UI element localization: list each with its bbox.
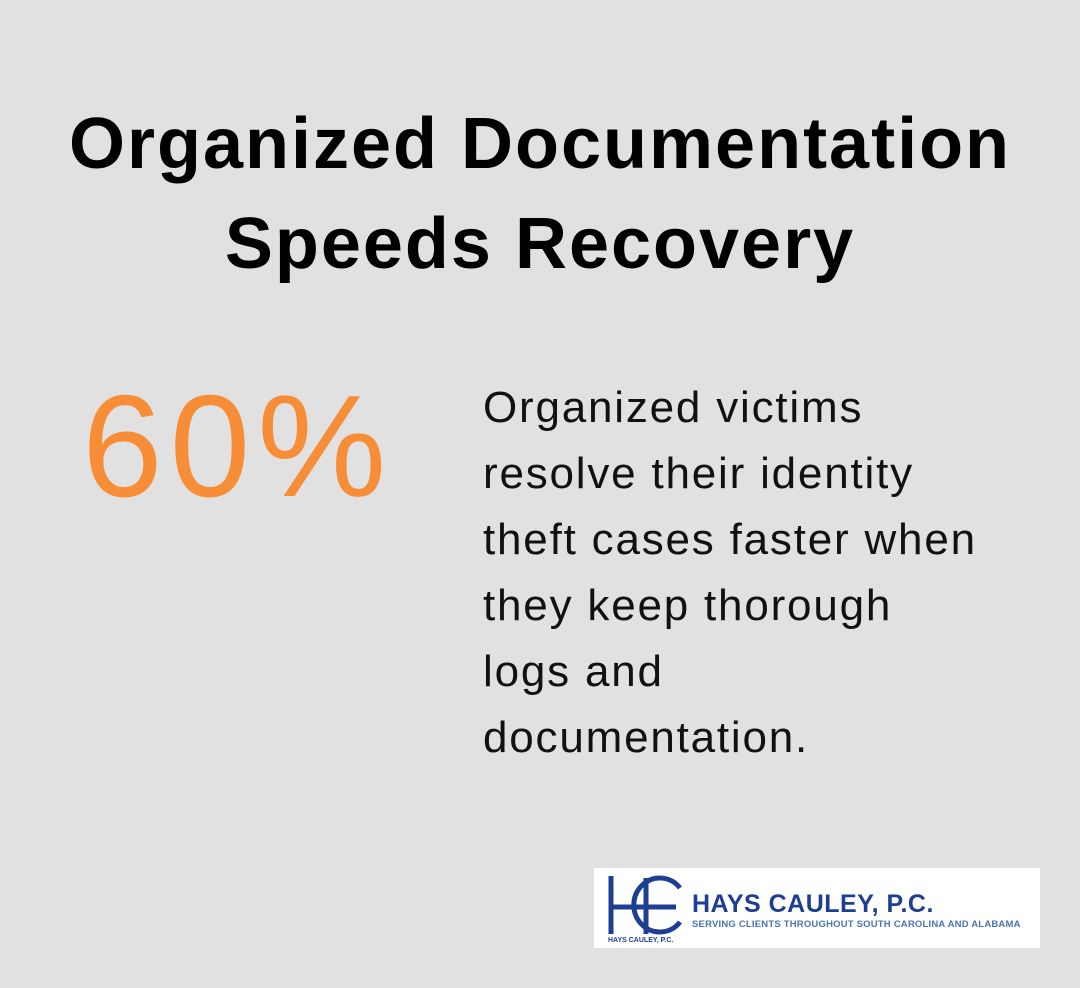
text block: description xyxy=(483,383,977,762)
logo: Hays Cauley: HAYS CAULEY, P.C. xyxy=(608,937,673,944)
text block: description: resolve their identity xyxy=(483,449,914,498)
logo: Hays Cauley: SERVING CLIENTS THROUGHOUT SOUTH CAROLINA AND ALABAMA xyxy=(692,919,1021,930)
title: Speeds Recovery xyxy=(225,204,855,284)
title: Organized Documentation xyxy=(69,104,1011,184)
text block: description: logs and xyxy=(483,647,664,696)
icon: HC monogram xyxy=(608,876,682,934)
text block: description: they keep thorough xyxy=(483,581,892,630)
text block: description: Organized victims xyxy=(483,383,863,432)
title xyxy=(69,104,1011,284)
text block: description: theft cases faster when xyxy=(483,515,977,564)
text block: description: documentation. xyxy=(483,713,809,762)
logo text: HAYS CAULEY, P.C. xyxy=(692,890,934,918)
logo: Hays Cauley xyxy=(594,868,1040,948)
stat: 60%: 60% xyxy=(82,365,393,527)
